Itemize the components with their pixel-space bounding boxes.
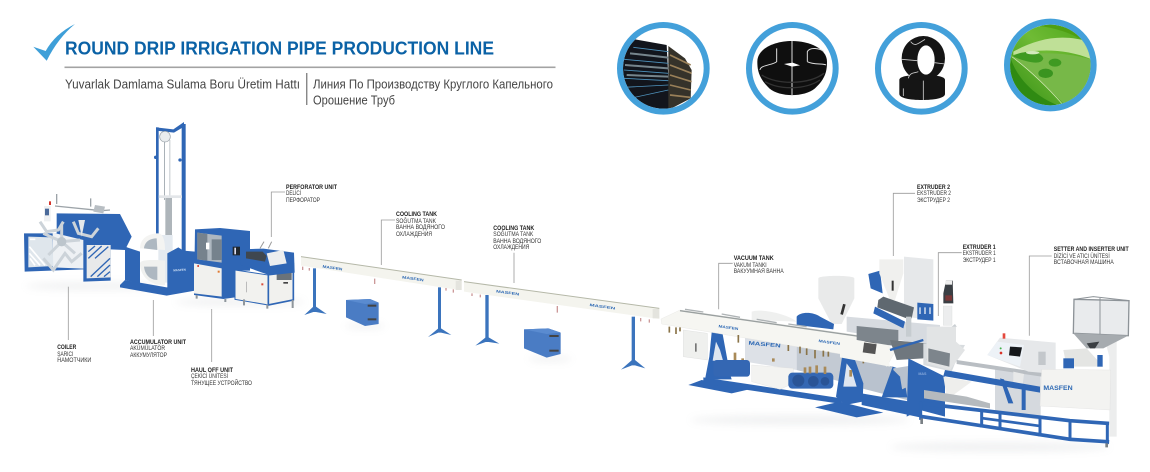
callout: haul off unit	[191, 309, 252, 387]
callout: cooling tank 1: SOĞUTMA TANK	[396, 218, 436, 225]
callout: accumulator unit: AKÜMÜLATÖR	[130, 345, 166, 352]
subtitle divider	[306, 73, 307, 105]
machine: vacuum tank and extruder base	[661, 276, 920, 417]
callout: cooling tank 2: ВАННА ВОДЯНОГО	[493, 239, 542, 245]
floor shadows	[25, 282, 1110, 452]
callout: extruder 1: ЭКСТРУДЕР 1	[963, 258, 996, 264]
tank legs	[304, 268, 451, 337]
callout: accumulator unit	[130, 300, 186, 359]
photo: green leaf with water drops	[1007, 22, 1094, 108]
callout: extruder 1: EKSTRUDER 1	[963, 251, 996, 257]
callout: perforator unit: PERFORATOR UNIT	[286, 185, 337, 191]
machine: vacuum tank and extruder base: MASFEN	[718, 324, 739, 331]
subtitle: Russian line 1: Линия По Производству Круглого Капельного	[313, 78, 553, 92]
callout: extruder 2: ЭКСТРУДЕР 2	[917, 198, 951, 204]
control panel	[987, 333, 1056, 374]
callout: setter and inserter unit: DİZİCİ VE ATICI ÜNİTESİ	[1054, 253, 1110, 260]
machine: haul off unit	[194, 228, 250, 302]
callout: haul off unit: HAUL OFF UNIT	[191, 368, 233, 374]
pumps	[713, 353, 851, 389]
tower frame	[154, 122, 186, 252]
extruder hopper	[818, 276, 854, 324]
blue arms	[943, 370, 1040, 393]
callout: haul off unit: ТЯНУЩЕЕ УСТРОЙСТВО	[191, 379, 252, 387]
callout: accumulator unit: ACCUMULATOR UNIT	[130, 340, 186, 346]
machine: setter and inserter unit	[921, 297, 1129, 447]
callout: cooling tank 1: ВАННА ВОДЯНОГО	[396, 225, 445, 231]
machine: second cooling tank: MASFEN	[496, 289, 520, 297]
callout: extruder 1	[938, 245, 996, 316]
callout: cooling tank 1: ОХЛАЖДЕНИЯ	[396, 232, 432, 238]
column	[1104, 337, 1117, 437]
callout: haul off unit: ÇEKİCİ ÜNİTESİ	[191, 373, 228, 380]
hopper	[1063, 297, 1129, 368]
lower cabinets	[745, 335, 797, 370]
machine: first cooling tank	[301, 257, 462, 337]
callout: extruder 2	[893, 185, 952, 256]
machine: accumulator unit	[120, 122, 195, 296]
photo: striped pipe coil	[620, 25, 707, 112]
callout: setter and inserter unit	[1029, 247, 1129, 336]
callout: cooling tank 1: COOLING TANK	[396, 212, 438, 218]
conveyor	[957, 360, 1042, 377]
icon: check mark	[33, 24, 75, 61]
callout: extruder 2: EKSTRUDER 2	[917, 191, 952, 197]
photo: two stacked coils	[878, 25, 965, 112]
callout: accumulator unit: АККУМУЛЯТОР	[130, 353, 167, 359]
subtitle: Turkish: Yuvarlak Damlama Sulama Boru Üretim Hattı	[65, 76, 300, 92]
callout: cooling tank 2: ОХЛАЖДЕНИЯ	[493, 245, 529, 251]
callout: perforator unit: DELİCİ	[286, 190, 301, 197]
callout: coiler: ŞARICI	[57, 352, 74, 358]
machine: vacuum tank and extruder base: MASFEN	[748, 341, 781, 349]
machine: first cooling tank: MASFEN	[322, 265, 343, 272]
product photo circles	[620, 22, 1094, 112]
callout: vacuum tank: ВАКУУМНАЯ ВАННА	[734, 269, 784, 275]
callout: setter and inserter unit: SETTER AND INSERTER UNIT	[1054, 247, 1129, 253]
callout: cooling tank 2	[493, 226, 542, 283]
subtitle: Russian line 2: Орошение Труб	[313, 94, 395, 108]
water unit	[346, 299, 379, 326]
callout: vacuum tank: VACUUM TANK	[734, 256, 774, 262]
grey stand	[995, 367, 1041, 420]
machine: extruder 2	[840, 257, 965, 397]
callout: cooling tank 2: COOLING TANK	[493, 226, 535, 232]
title: ROUND DRIP IRRIGATION PIPE PRODUCTION LINE	[65, 38, 494, 58]
callout: perforator unit: ПЕРФОРАТОР	[286, 198, 320, 204]
main blue base	[907, 358, 945, 417]
water unit	[524, 328, 561, 358]
callout: coiler: COILER	[57, 345, 77, 351]
machine: perforator unit	[235, 242, 295, 309]
callout: coiler	[57, 287, 91, 364]
base rails	[688, 332, 920, 417]
machine: setter and inserter unit: MASFEN	[1043, 386, 1073, 392]
title rule	[64, 66, 556, 68]
machine: accumulator unit: MASFEN	[173, 268, 186, 272]
callout: vacuum tank	[719, 256, 784, 309]
machine: second cooling tank: MASFEN	[589, 303, 616, 311]
machine: second cooling tank	[464, 282, 659, 370]
frame	[921, 403, 1107, 443]
callout: perforator unit	[271, 185, 337, 237]
machine: extruder 1	[907, 281, 990, 417]
callout: extruder 1: EXTRUDER 1	[963, 245, 996, 251]
machine: coiler	[24, 194, 132, 282]
machine: vacuum tank and extruder base: MASFEN	[818, 339, 841, 346]
callout: setter and inserter unit: ВСТАВОЧНАЯ МАШИНА	[1054, 260, 1114, 266]
callout: vacuum tank: VAKUM TANKI	[734, 263, 767, 269]
callout: extruder 2: EXTRUDER 2	[917, 185, 951, 191]
machine: extruder 1: MAS	[918, 372, 927, 376]
callout: cooling tank 2: SOĞUTMA TANK	[493, 231, 533, 238]
white box	[1040, 369, 1111, 410]
vacuum tank body	[661, 310, 895, 367]
machine: first cooling tank: MASFEN	[402, 275, 424, 282]
callout: coiler: НАМОТЧИКИ	[57, 358, 91, 364]
callout: cooling tank 1	[381, 212, 445, 265]
photo: black coil	[749, 25, 836, 112]
